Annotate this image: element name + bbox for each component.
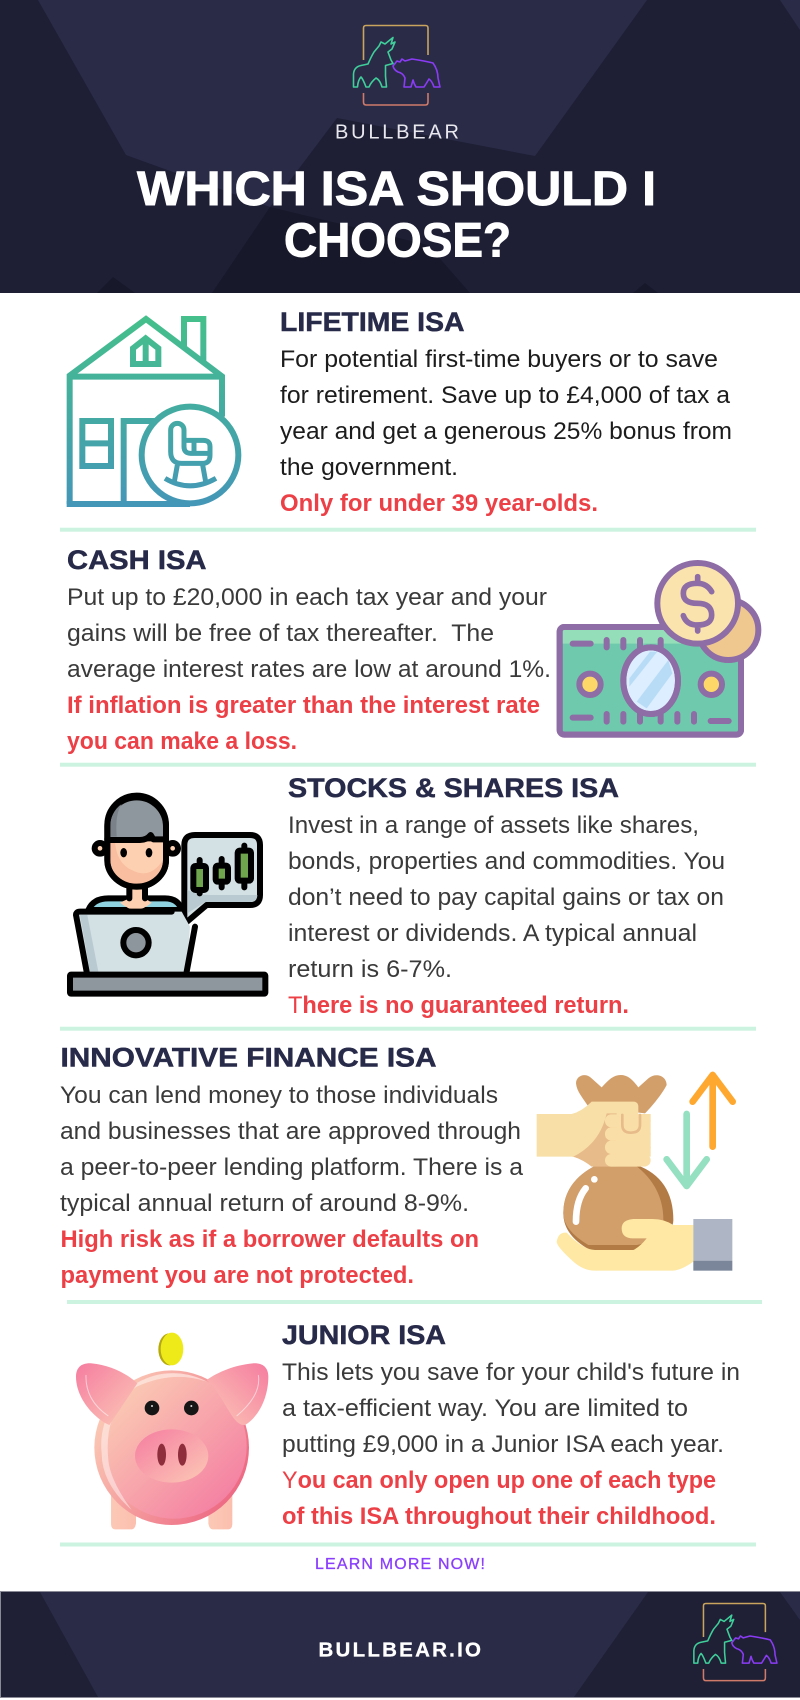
- text block: a tax-efficient way. You are limited to: [282, 1395, 688, 1422]
- icon: house with rocking chair: [67, 319, 238, 504]
- heading: JUNIOR ISA: [282, 1320, 446, 1350]
- text block: year and get a generous 25% bonus from: [280, 418, 732, 445]
- text block: Put up to £20,000 in each tax year and your: [67, 584, 547, 611]
- logo: footer mark: [694, 1603, 777, 1681]
- brand name: BULLBEAR: [335, 122, 459, 144]
- panel: innovative finance ISA: [60, 1043, 733, 1289]
- title: [137, 163, 656, 268]
- icon: hands passing money bag with arrows: [537, 1075, 733, 1271]
- warning: [67, 692, 540, 755]
- warning: Only for under 39 year-olds.: [280, 490, 598, 517]
- title: CHOOSE?: [284, 214, 511, 268]
- icon: piggy bank with coin: [76, 1333, 268, 1529]
- heading: INNOVATIVE FINANCE ISA: [60, 1043, 436, 1073]
- text block: and businesses that are approved through: [60, 1118, 521, 1145]
- footer banner: [0, 1592, 800, 1698]
- text block: [282, 1359, 740, 1458]
- text block: return is 6-7%.: [288, 956, 452, 983]
- text block: the government.: [280, 454, 458, 481]
- text block: [67, 584, 551, 683]
- warning: [60, 1226, 479, 1289]
- warning: There is no guaranteed return.: [288, 992, 629, 1019]
- title: WHICH ISA SHOULD I: [137, 163, 656, 216]
- header banner: [0, 0, 800, 293]
- text block: gains will be free of tax thereafter. The: [67, 620, 494, 647]
- text block: don’t need to pay capital gains or tax on: [288, 884, 724, 911]
- heading: CASH ISA: [67, 545, 206, 575]
- text block: typical annual return of around 8-9%.: [60, 1190, 469, 1217]
- warning: of this ISA throughout their childhood.: [282, 1503, 716, 1530]
- warning: High risk as if a borrower defaults on: [60, 1226, 479, 1253]
- warning: payment you are not protected.: [60, 1262, 414, 1289]
- panel: cash ISA: [67, 545, 758, 755]
- warning: you can make a loss.: [67, 728, 297, 755]
- text block: average interest rates are low at around 1%.: [67, 656, 551, 683]
- text block: [60, 1082, 524, 1217]
- text block: This lets you save for your child's future in: [282, 1359, 740, 1386]
- text block: [280, 346, 732, 481]
- text block: You can lend money to those individuals: [60, 1082, 498, 1109]
- heading: STOCKS & SHARES ISA: [288, 773, 619, 803]
- icon: person at laptop with chart bubble: [70, 796, 265, 994]
- text block: For potential first-time buyers or to save: [280, 346, 718, 373]
- text block: [288, 812, 725, 983]
- text block: for retirement. Save up to £4,000 of tax a: [280, 382, 731, 409]
- icon: banknote and coins: [560, 563, 758, 735]
- panel: junior ISA: [76, 1320, 740, 1530]
- panel: lifetime ISA: [67, 307, 732, 517]
- text block: putting £9,000 in a Junior ISA each year.: [282, 1431, 724, 1458]
- text block: bonds, properties and commodities. You: [288, 848, 725, 875]
- text block: Invest in a range of assets like shares,: [288, 812, 699, 839]
- text block: a peer-to-peer lending platform. There is a: [60, 1154, 524, 1181]
- call to action: LEARN MORE NOW!: [315, 1556, 485, 1573]
- panel: stocks and shares ISA: [70, 773, 725, 1019]
- logo: bullbear mark: [354, 26, 440, 105]
- text block: interest or dividends. A typical annual: [288, 920, 697, 947]
- warning: [282, 1467, 716, 1530]
- warning: If inflation is greater than the interest rate: [67, 692, 540, 719]
- footer brand: BULLBEAR.IO: [318, 1639, 481, 1662]
- warning: You can only open up one of each type: [282, 1467, 716, 1494]
- heading: LIFETIME ISA: [280, 307, 464, 337]
